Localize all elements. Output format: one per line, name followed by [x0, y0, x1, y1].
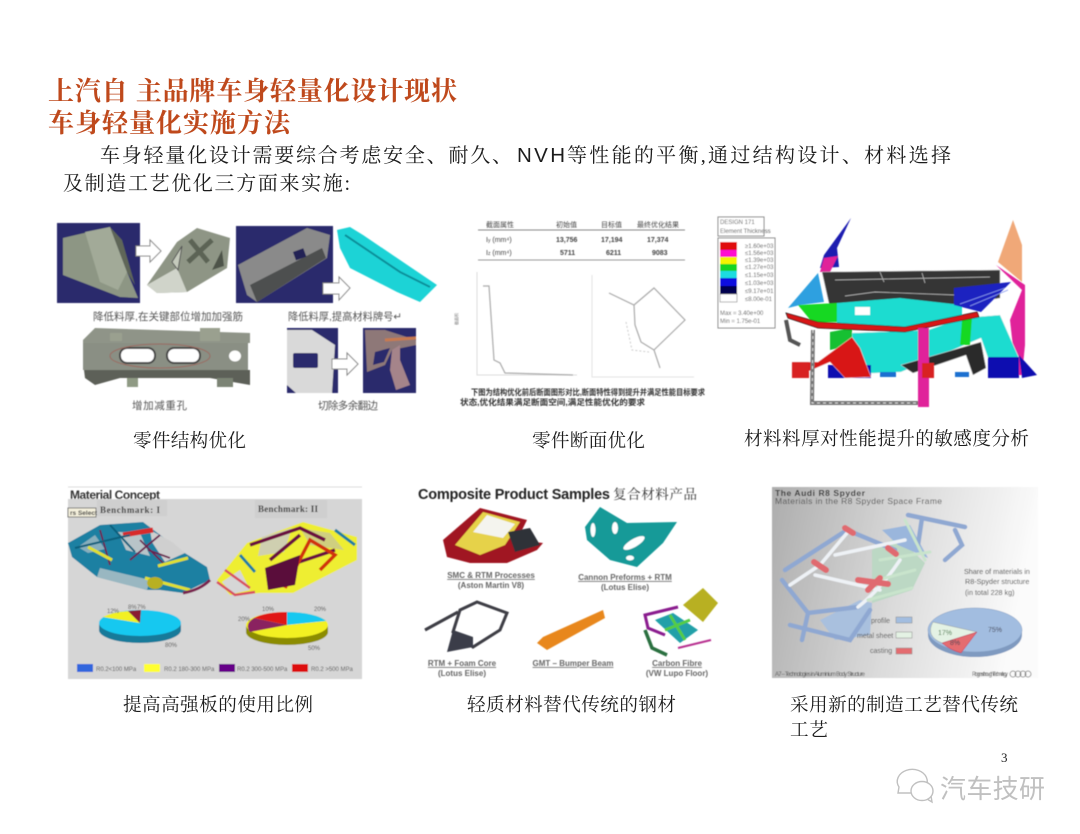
controls	[68, 500, 327, 518]
line chart: convergence	[453, 272, 577, 375]
line chart: convergence: 截面积	[453, 313, 459, 325]
title: 车身轻量化实施方法	[48, 109, 292, 138]
colour legend: ≤1.56e+03	[745, 251, 774, 257]
caption: 零件结构优化	[133, 431, 246, 452]
legend	[77, 664, 354, 673]
pie chart: 75%	[988, 627, 1002, 634]
panel heading: Composite Product Samples	[418, 487, 610, 503]
panel: Audi R8 frame	[772, 487, 1038, 678]
data table: Iy (mm⁴)	[486, 237, 512, 244]
data table: 13,756	[556, 237, 578, 244]
caption: 材料料厚对性能提升的敏感度分析	[744, 429, 1029, 450]
pie chart I: 80%	[165, 643, 178, 649]
chart caption: 下图为结构优化前后断面图形对比,断面特性得到提升并满足性能目标要求	[471, 387, 705, 397]
legend: R0.2 >500 MPa	[311, 667, 354, 673]
line chart: section shape	[592, 275, 694, 377]
panel heading	[418, 486, 697, 503]
frame legend: metal sheet	[857, 633, 893, 640]
pie chart: 8%	[950, 640, 960, 647]
panel heading: Material Concept	[70, 488, 160, 502]
data table: 5711	[560, 250, 575, 257]
image: gusset after	[147, 228, 230, 293]
legend: R0.2 300-500 MPa	[237, 667, 288, 673]
caption: 零件断面优化	[532, 431, 645, 452]
legend header: Element Thickness	[720, 229, 771, 235]
data table: 17,374	[647, 237, 669, 244]
image: flange before	[287, 328, 338, 393]
image: perforated rail	[83, 328, 250, 387]
panel heading: Materials in the R8 Spyder Space Frame	[775, 496, 942, 506]
pie note: (in total 228 kg)	[965, 588, 1015, 597]
car body model II	[217, 522, 357, 595]
part caption: 降低料厚,提高材料牌号↵	[288, 310, 402, 323]
part labels: SMC & RTM Processes	[447, 571, 535, 580]
pie chart II: 10%	[262, 607, 275, 613]
arrow	[332, 353, 358, 375]
body-in-white thickness model	[786, 218, 1037, 407]
chart caption	[460, 387, 705, 407]
part labels: GMT – Bumper Beam	[533, 659, 613, 668]
intro text	[63, 144, 951, 195]
frame legend: profile	[871, 618, 890, 625]
colour legend: ≤9.17e+01	[745, 289, 774, 295]
footer and rings: Progress through Technology	[972, 672, 1008, 678]
pie chart II: 20%	[238, 617, 251, 623]
footer and rings	[775, 671, 1031, 678]
car body model I	[68, 522, 210, 593]
intro text: 等性能的平衡,通过结构设计、材料选择	[567, 144, 951, 167]
data table: 最终优化结果	[637, 220, 679, 229]
arrow	[323, 277, 350, 300]
image: beam before	[236, 226, 333, 303]
arrow	[136, 240, 161, 262]
controls: Benchmark: I	[100, 505, 160, 515]
colour legend: ≤1.27e+03	[745, 265, 774, 271]
legend: R0.2<100 MPa	[96, 667, 137, 673]
panel: part structure optimization	[57, 223, 437, 412]
colour legend: Max = 3.40e+00	[720, 311, 764, 317]
legend header: DESIGN 171	[720, 220, 755, 226]
intro text: 车身轻量化设计需要综合考虑安全、耐久、	[100, 144, 512, 167]
caption: 轻质材料替代传统的钢材	[467, 695, 676, 716]
caption	[790, 695, 1018, 741]
data table: Iz (mm⁴)	[486, 250, 512, 257]
pie chart I	[99, 605, 181, 649]
pie chart: 17%	[938, 630, 952, 637]
part: teal bonnet	[585, 507, 677, 567]
data table: 截面属性	[486, 220, 514, 229]
part: windscreen frame	[425, 602, 507, 652]
data table: 目标值	[601, 220, 622, 229]
caption: 提高高强板的使用比例	[123, 695, 313, 716]
title	[48, 76, 458, 138]
intro text: 及制造工艺优化三方面来实施:	[63, 172, 350, 195]
pie note	[964, 567, 1030, 597]
part labels: RTM + Foam Core	[428, 659, 497, 668]
chart caption: 状态,优化结果满足断面空间,满足性能优化的要求	[460, 397, 645, 407]
part labels: (Aston Martin V8)	[458, 581, 524, 590]
part labels	[428, 571, 708, 678]
data table: 初始值	[556, 220, 577, 229]
data table	[478, 220, 685, 260]
pie chart I: 12%	[107, 609, 120, 615]
data table: 17,194	[601, 237, 623, 244]
controls: Benchmark: II	[258, 504, 318, 514]
pie chart I: 8%	[128, 605, 137, 611]
panel: thickness sensitivity	[718, 217, 1037, 407]
colour legend: ≥1.60e+03	[745, 244, 774, 250]
part: bumper beam	[537, 610, 605, 650]
panel: section optimization	[453, 220, 705, 407]
frame legend: casting	[870, 648, 892, 655]
pie chart II: 50%	[308, 646, 321, 652]
colour legend: Min = 1.75e-01	[720, 319, 761, 325]
part labels: (Lotus Elise)	[438, 669, 486, 678]
pie chart I: 7%	[137, 605, 146, 611]
part labels: Cannon Preforms + RTM	[578, 573, 672, 582]
image: gusset before	[57, 223, 140, 303]
footer and rings: A7 – Technologies in Aluminium Body Structure	[775, 672, 866, 678]
colour legend: ≤1.39e+03	[745, 258, 774, 264]
caption: 采用新的制造工艺替代传统	[790, 695, 1018, 716]
intro text: NVH	[517, 144, 565, 167]
data table: 6211	[606, 250, 621, 257]
part: carbon floor	[645, 588, 718, 655]
part: SMC tub	[443, 508, 543, 563]
frame legend	[857, 617, 912, 655]
part caption: 增加减重孔	[132, 399, 188, 412]
image: flange after	[363, 328, 416, 393]
panel heading: 复合材料产品	[613, 486, 697, 502]
colour legend: ≤1.03e+03	[745, 281, 774, 287]
panel heading: The Audi R8 Spyder	[775, 488, 866, 498]
pie chart II: 20%	[314, 607, 327, 613]
panel heading	[775, 488, 942, 506]
pie note: R8-Spyder structure	[965, 577, 1029, 586]
part labels: (Lotus Elise)	[601, 583, 649, 592]
part labels: Carbon Fibre	[652, 659, 702, 668]
caption: 工艺	[790, 720, 828, 741]
colour legend: ≤8.00e-01	[745, 297, 773, 303]
space frame	[782, 515, 965, 640]
legend: R0.2 180-300 MPa	[164, 667, 215, 673]
part labels: (VW Lupo Floor)	[646, 669, 708, 678]
controls: rs Select	[70, 510, 98, 517]
colour legend: ≤1.15e+03	[745, 273, 774, 279]
pie chart II	[238, 607, 328, 652]
watermark: WeChat icon	[897, 769, 933, 802]
panel: composite samples	[418, 486, 718, 678]
panel: material concept	[68, 487, 362, 679]
part caption: 降低料厚,在关键部位增加加强筋	[93, 310, 243, 323]
data table: 9083	[652, 250, 668, 257]
watermark text: 汽车技研	[940, 774, 1045, 804]
title: 上汽自 主品牌车身轻量化设计现状	[48, 76, 458, 106]
pie chart	[928, 608, 1022, 657]
colour legend	[718, 238, 775, 328]
pie note: Share of materials in	[964, 567, 1030, 576]
legend header	[718, 217, 771, 236]
image: beam after cyan	[337, 227, 437, 302]
page number: 3	[1001, 750, 1008, 765]
part caption: 切除多余翻边	[318, 399, 378, 412]
